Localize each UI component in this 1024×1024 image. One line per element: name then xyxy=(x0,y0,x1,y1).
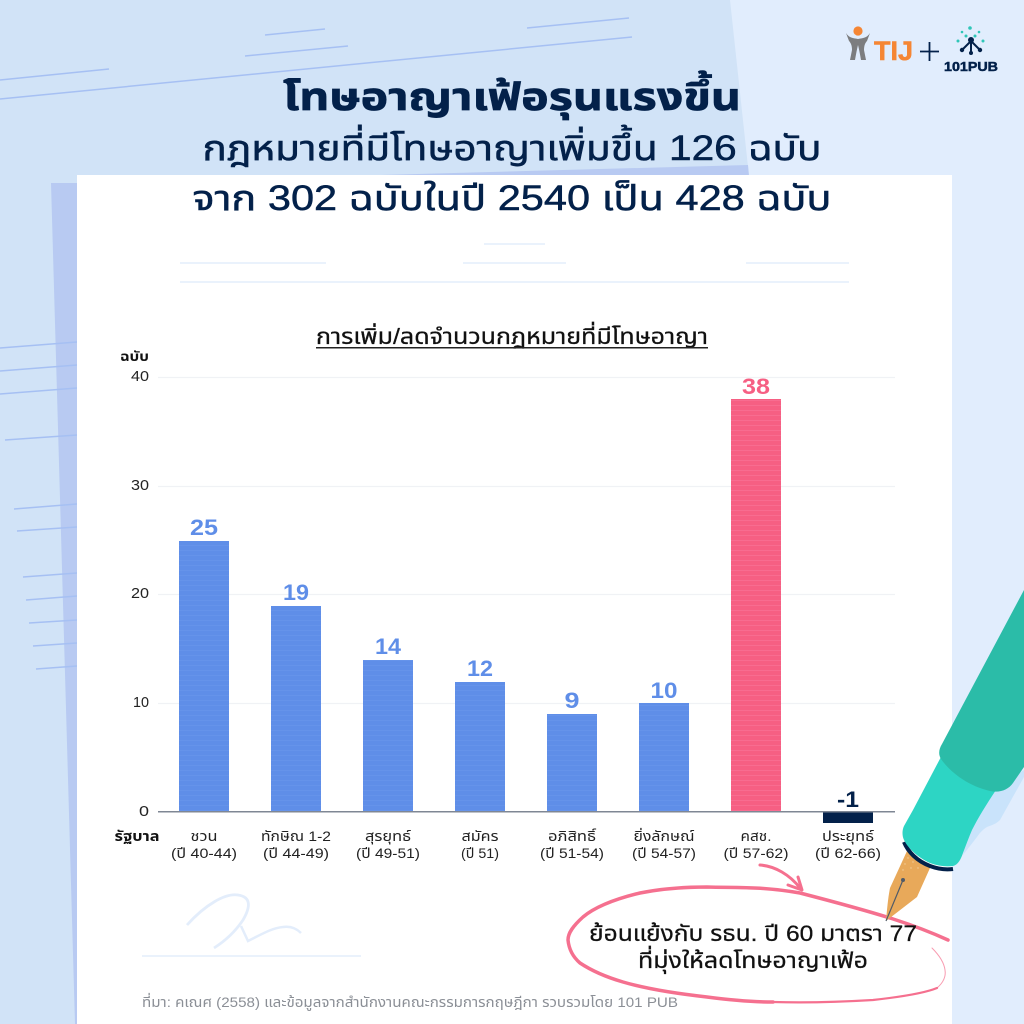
y axis labels: 40 xyxy=(131,368,149,385)
government axis labels: (ปี 51-54) xyxy=(540,845,604,861)
government axis labels: ประยุทธ์ xyxy=(822,828,874,845)
value labels: 38 xyxy=(742,374,770,399)
pen barrel xyxy=(902,745,996,866)
title: จาก 302 ฉบับในปี 2540 เป็น 428 ฉบับ xyxy=(192,179,832,218)
pen cap xyxy=(939,590,1024,792)
x axis xyxy=(158,811,895,812)
government axis labels: (ปี 62-66) xyxy=(815,845,881,861)
plus sign xyxy=(920,42,939,61)
icon: 101 PUB network xyxy=(956,26,984,55)
y axis labels: 10 xyxy=(133,694,149,711)
logos: TIJ + 101 PUB xyxy=(846,26,998,74)
government axis labels: ทักษิณ 1-2 xyxy=(261,828,331,844)
nib slit xyxy=(886,880,903,921)
gridlines xyxy=(158,378,895,704)
government axis labels: คสช. xyxy=(740,828,772,844)
callout circle xyxy=(568,887,948,1002)
bar chart xyxy=(114,349,895,861)
icon: signature xyxy=(142,895,361,956)
government axis labels: สมัคร xyxy=(462,828,499,844)
y axis labels xyxy=(120,349,149,820)
value labels: -1 xyxy=(837,787,859,812)
arrow to callout xyxy=(760,865,802,890)
government axis labels: (ปี 57-62) xyxy=(724,845,788,861)
paper shadow xyxy=(51,165,749,1024)
y axis labels: 0 xyxy=(139,803,149,820)
y axis labels: ฉบับ xyxy=(120,349,149,364)
government axis labels: ชวน xyxy=(190,828,218,844)
pen nib xyxy=(886,851,930,921)
government axis labels: (ปี 44-49) xyxy=(263,845,329,861)
y axis labels: 30 xyxy=(131,477,149,494)
government axis labels xyxy=(114,827,881,861)
icon: TIJ figure xyxy=(846,26,870,60)
government axis labels: สุรยุทธ์ xyxy=(365,828,411,845)
101 PUB wordmark: 101PUB xyxy=(944,59,998,74)
value labels: 9 xyxy=(564,688,580,713)
value labels xyxy=(190,374,859,812)
source note: ที่มา: คเณศ (2558) และข้อมูลจากสำนักงานคณะกรรมการกฤษฎีกา รวบรวมโดย 101 PUB xyxy=(142,992,678,1011)
callout text: ย้อนแย้งกับ รธน. ปี 60 มาตรา 77 xyxy=(589,921,917,946)
icon: fountain pen xyxy=(886,590,1024,921)
chart heading: การเพิ่ม/ลดจำนวนกฎหมายที่มีโทษอาญา xyxy=(316,321,708,349)
white paper panel xyxy=(77,175,952,1024)
ruled lines on back sheet xyxy=(0,18,632,669)
government axis labels: รัฐบาล xyxy=(114,828,160,844)
title: โทษอาญาเฟ้อรุนแรงขึ้น xyxy=(283,70,741,120)
nib dots xyxy=(902,857,919,871)
value labels: 10 xyxy=(650,678,678,703)
pen ring xyxy=(904,842,953,869)
back sheet of paper xyxy=(0,0,749,1024)
government axis labels: (ปี 54-57) xyxy=(632,845,696,861)
faint paper lines xyxy=(180,244,849,282)
title: กฎหมายที่มีโทษอาญาเพิ่มขึ้น 126 ฉบับ xyxy=(202,124,822,168)
title xyxy=(192,70,832,218)
pen shadow xyxy=(963,770,1024,855)
TIJ wordmark: TIJ xyxy=(874,36,913,66)
government axis labels: (ปี 40-44) xyxy=(171,845,237,861)
callout text xyxy=(589,921,917,974)
value labels: 12 xyxy=(467,656,493,681)
value labels: 14 xyxy=(375,634,402,659)
value labels: 19 xyxy=(283,580,309,605)
government axis labels: (ปี 51) xyxy=(461,845,499,861)
y axis labels: 20 xyxy=(131,585,149,602)
callout text: ที่มุ่งให้ลดโทษอาญาเฟ้อ xyxy=(638,945,868,974)
government axis labels: ยิ่งลักษณ์ xyxy=(634,827,694,844)
government axis labels: (ปี 49-51) xyxy=(356,845,420,861)
value labels: 25 xyxy=(190,515,218,540)
bars xyxy=(179,541,229,811)
government axis labels: อภิสิทธิ์ xyxy=(548,828,596,844)
